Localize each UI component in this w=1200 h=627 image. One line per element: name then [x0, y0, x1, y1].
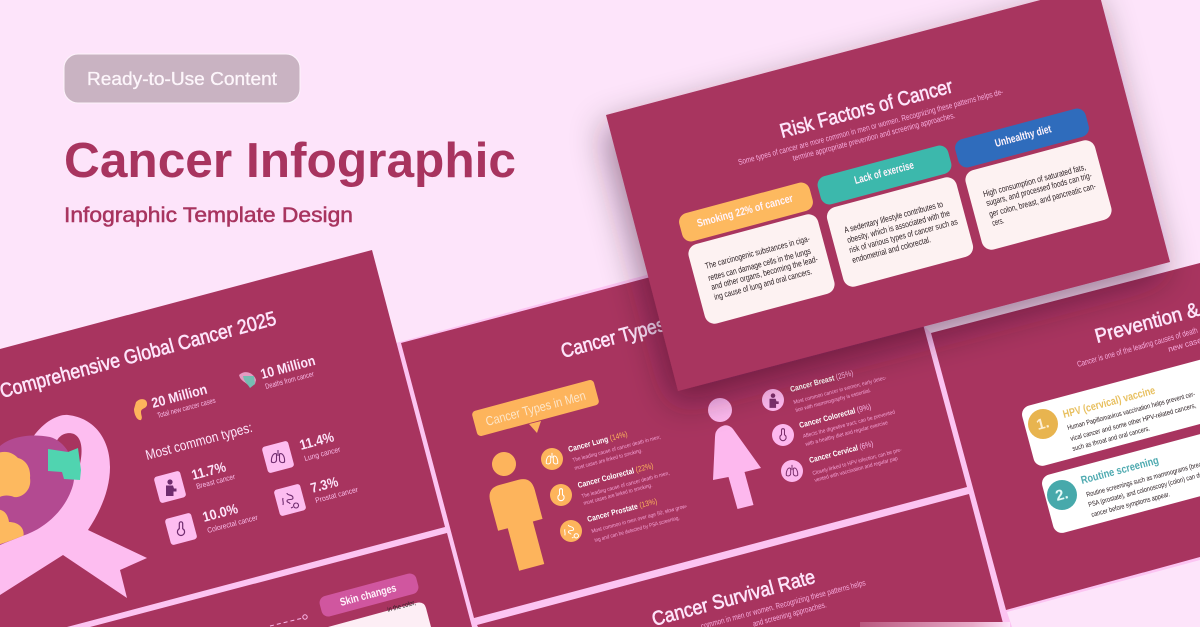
column: lack of exercise: risk of various types of cancer such as	[848, 216, 959, 255]
column: smoking	[677, 181, 837, 326]
column: lack of exercise: obesity, which is associated with the	[846, 208, 951, 245]
slide title: Cancer Types	[559, 314, 668, 363]
card: routine screening: Routine screening	[1080, 455, 1160, 487]
column: smoking: The carcinogenic substances in ciga-	[704, 233, 811, 271]
item: cancer prostate: Most common in men over age 50; slow grow-	[591, 503, 688, 535]
floor below prevention slide	[1007, 560, 1200, 627]
item: cancer cervical: Cancer Cervical (6%)	[808, 439, 875, 465]
item: cancer prostate: ing and can be detected by PSA screening.	[594, 515, 681, 544]
dashed connector	[270, 618, 303, 626]
icon: kidney	[134, 399, 147, 420]
card: skin changes	[328, 600, 431, 627]
slide background	[0, 250, 445, 627]
column: lack of exercise	[816, 144, 975, 289]
item: cancer colorectal men: most cases are linked to smoking.	[583, 483, 653, 507]
item: cancer breast: tion with mammography is essential.	[795, 388, 872, 414]
stat tile: breast cancer	[153, 458, 237, 504]
card: skin changes: in the color,	[387, 600, 417, 614]
slide: cancer types	[401, 213, 967, 618]
column: unhealthy diet: ger colon, breast, and pancreatic can-	[988, 181, 1097, 219]
card: HPV vaccine: 1.	[1035, 414, 1051, 434]
item: cancer colorectal women: Cancer Colorectal (9%)	[798, 402, 872, 430]
column: lack of exercise: A sedentary lifestyle contributes to	[843, 199, 944, 235]
value: 20 Million	[150, 381, 209, 411]
column: unhealthy diet: sugars, and processed foods can trig-	[985, 170, 1093, 208]
slide: cancer survival rate (partial)	[477, 494, 1010, 627]
stat tile: prostate cancer: Prostat cancer	[314, 485, 359, 505]
item: cancer lung: most cases are linked to smoking.	[574, 448, 644, 472]
value: 10 Million	[259, 352, 317, 382]
stat tile: prostate cancer	[273, 473, 359, 517]
slide background	[931, 263, 1200, 610]
stat tile: colorectal cancer: Colorectal cancer	[206, 513, 259, 535]
card: HPV vaccine: such as throat and oral cancers.	[1072, 425, 1151, 453]
column: lack of exercise: endometrial and colorectal.	[851, 234, 932, 265]
item: cancer prostate	[560, 497, 688, 544]
slide title: Comprehensive Global Cancer 2025	[0, 308, 279, 403]
stat tile: lung cancer	[261, 428, 342, 474]
slide frame strips	[0, 208, 1200, 627]
slide: prevention	[931, 263, 1200, 610]
column: unhealthy diet: cers.	[991, 215, 1005, 228]
item: cancer lung: Cancer Lung (14%)	[567, 429, 629, 454]
slide description	[737, 87, 1004, 167]
slide background	[401, 213, 967, 618]
main title: Cancer Infographic	[64, 134, 516, 188]
stat tile: colorectal cancer: 10.0%	[201, 500, 240, 525]
callout: cancer types in men: Cancer Types in Men	[484, 388, 587, 429]
header block	[64, 54, 516, 227]
stat tile: lung cancer: 11.4%	[298, 428, 336, 453]
pill: skin changes: Skin changes	[339, 582, 398, 609]
item: cancer cervical: vented with vaccination and regular pap	[814, 456, 899, 484]
card: routine screening: 2.	[1054, 485, 1070, 505]
callout: cancer types in men	[471, 379, 600, 437]
stat tile: colorectal cancer	[164, 500, 259, 546]
column: smoking: and other organs, becoming the lead-	[710, 254, 819, 292]
badge: ready-to-use content: Ready-to-Use Content	[87, 69, 277, 89]
badge: ready-to-use content	[64, 54, 300, 103]
card: routine screening: cancer before symptoms appear.	[1091, 491, 1171, 519]
slide: warning signs (partial)	[90, 533, 472, 627]
stat tile: lung cancer: Lung cancer	[303, 445, 342, 463]
column: smoking: ing cause of lung and oral cancers.	[713, 266, 813, 302]
connector dot	[303, 615, 307, 619]
item: cancer breast	[762, 368, 887, 414]
slide description: termine appropriate prevention and screening approaches.	[792, 111, 956, 163]
item: cancer breast: Most common cancer in women; early detec-	[793, 375, 887, 406]
stat tile: breast cancer: 11.7%	[190, 458, 228, 483]
item: cancer prostate: Cancer Prostate (13%)	[586, 497, 658, 524]
item: cancer colorectal men: The leading cause of cancer death in men,	[581, 470, 671, 500]
caption: Total new cancer cases	[156, 396, 217, 420]
column: unhealthy diet	[953, 107, 1114, 252]
item: cancer colorectal women: Affects the digestive tract; can be prevented	[802, 410, 896, 440]
item: cancer lung	[541, 429, 662, 472]
icon: male figure	[479, 446, 554, 573]
slide description: Some types of cancer are more common in men or women. Recognizing these patterns helps de-	[737, 87, 1004, 167]
illustration: globe with pink ribbon	[0, 415, 147, 598]
slide background	[477, 494, 1004, 627]
column: unhealthy diet: Unhealthy diet	[994, 123, 1053, 150]
icon: female figure	[708, 398, 761, 509]
column: unhealthy diet: High consumption of saturated fats,	[982, 162, 1087, 199]
card: HPV vaccine	[1020, 330, 1200, 468]
slide: risk factors of cancer	[606, 0, 1170, 391]
stat: new cases	[134, 381, 217, 420]
column: smoking: Smoking 22% of cancer	[696, 193, 795, 230]
column: smoking: rettes can damage cells in the lungs	[707, 246, 812, 283]
stat tile: breast cancer: Breast cancer	[195, 472, 237, 491]
stat: deaths	[239, 352, 317, 391]
card: HPV vaccine: HPV (cervical) vaccine	[1062, 385, 1157, 421]
subtitle: Infographic Template Design	[64, 204, 353, 227]
item: cancer colorectal men	[550, 461, 671, 507]
item: cancer colorectal men: Cancer Colorectal (22%)	[577, 461, 655, 490]
card edge	[860, 622, 1010, 627]
item: cancer colorectal women: with a healthy diet and regular exercise	[804, 420, 889, 448]
slide background	[90, 533, 472, 627]
item: cancer cervical	[781, 439, 903, 484]
subheading: Most common types:	[144, 419, 254, 463]
item: cancer breast: Cancer Breast (25%)	[789, 368, 855, 394]
caption: Deaths from cancer	[264, 369, 315, 391]
item: cancer cervical: Closely linked to HPV infection; can be pre-	[812, 447, 903, 477]
stat tile: prostate cancer: 7.3%	[309, 473, 340, 496]
item: cancer colorectal women	[772, 402, 896, 448]
slide title: Risk Factors of Cancer	[778, 75, 956, 143]
slide description	[700, 578, 867, 627]
item: cancer lung: The leading cause of cancer death in men;	[572, 434, 662, 464]
icon: liver	[239, 372, 256, 387]
slide background	[606, 0, 1170, 391]
card: routine screening	[1040, 399, 1200, 535]
slide: comprehensive global cancer 2025	[0, 250, 445, 627]
pill: skin changes	[318, 572, 420, 618]
column: lack of exercise: Lack of exercise	[853, 160, 915, 187]
